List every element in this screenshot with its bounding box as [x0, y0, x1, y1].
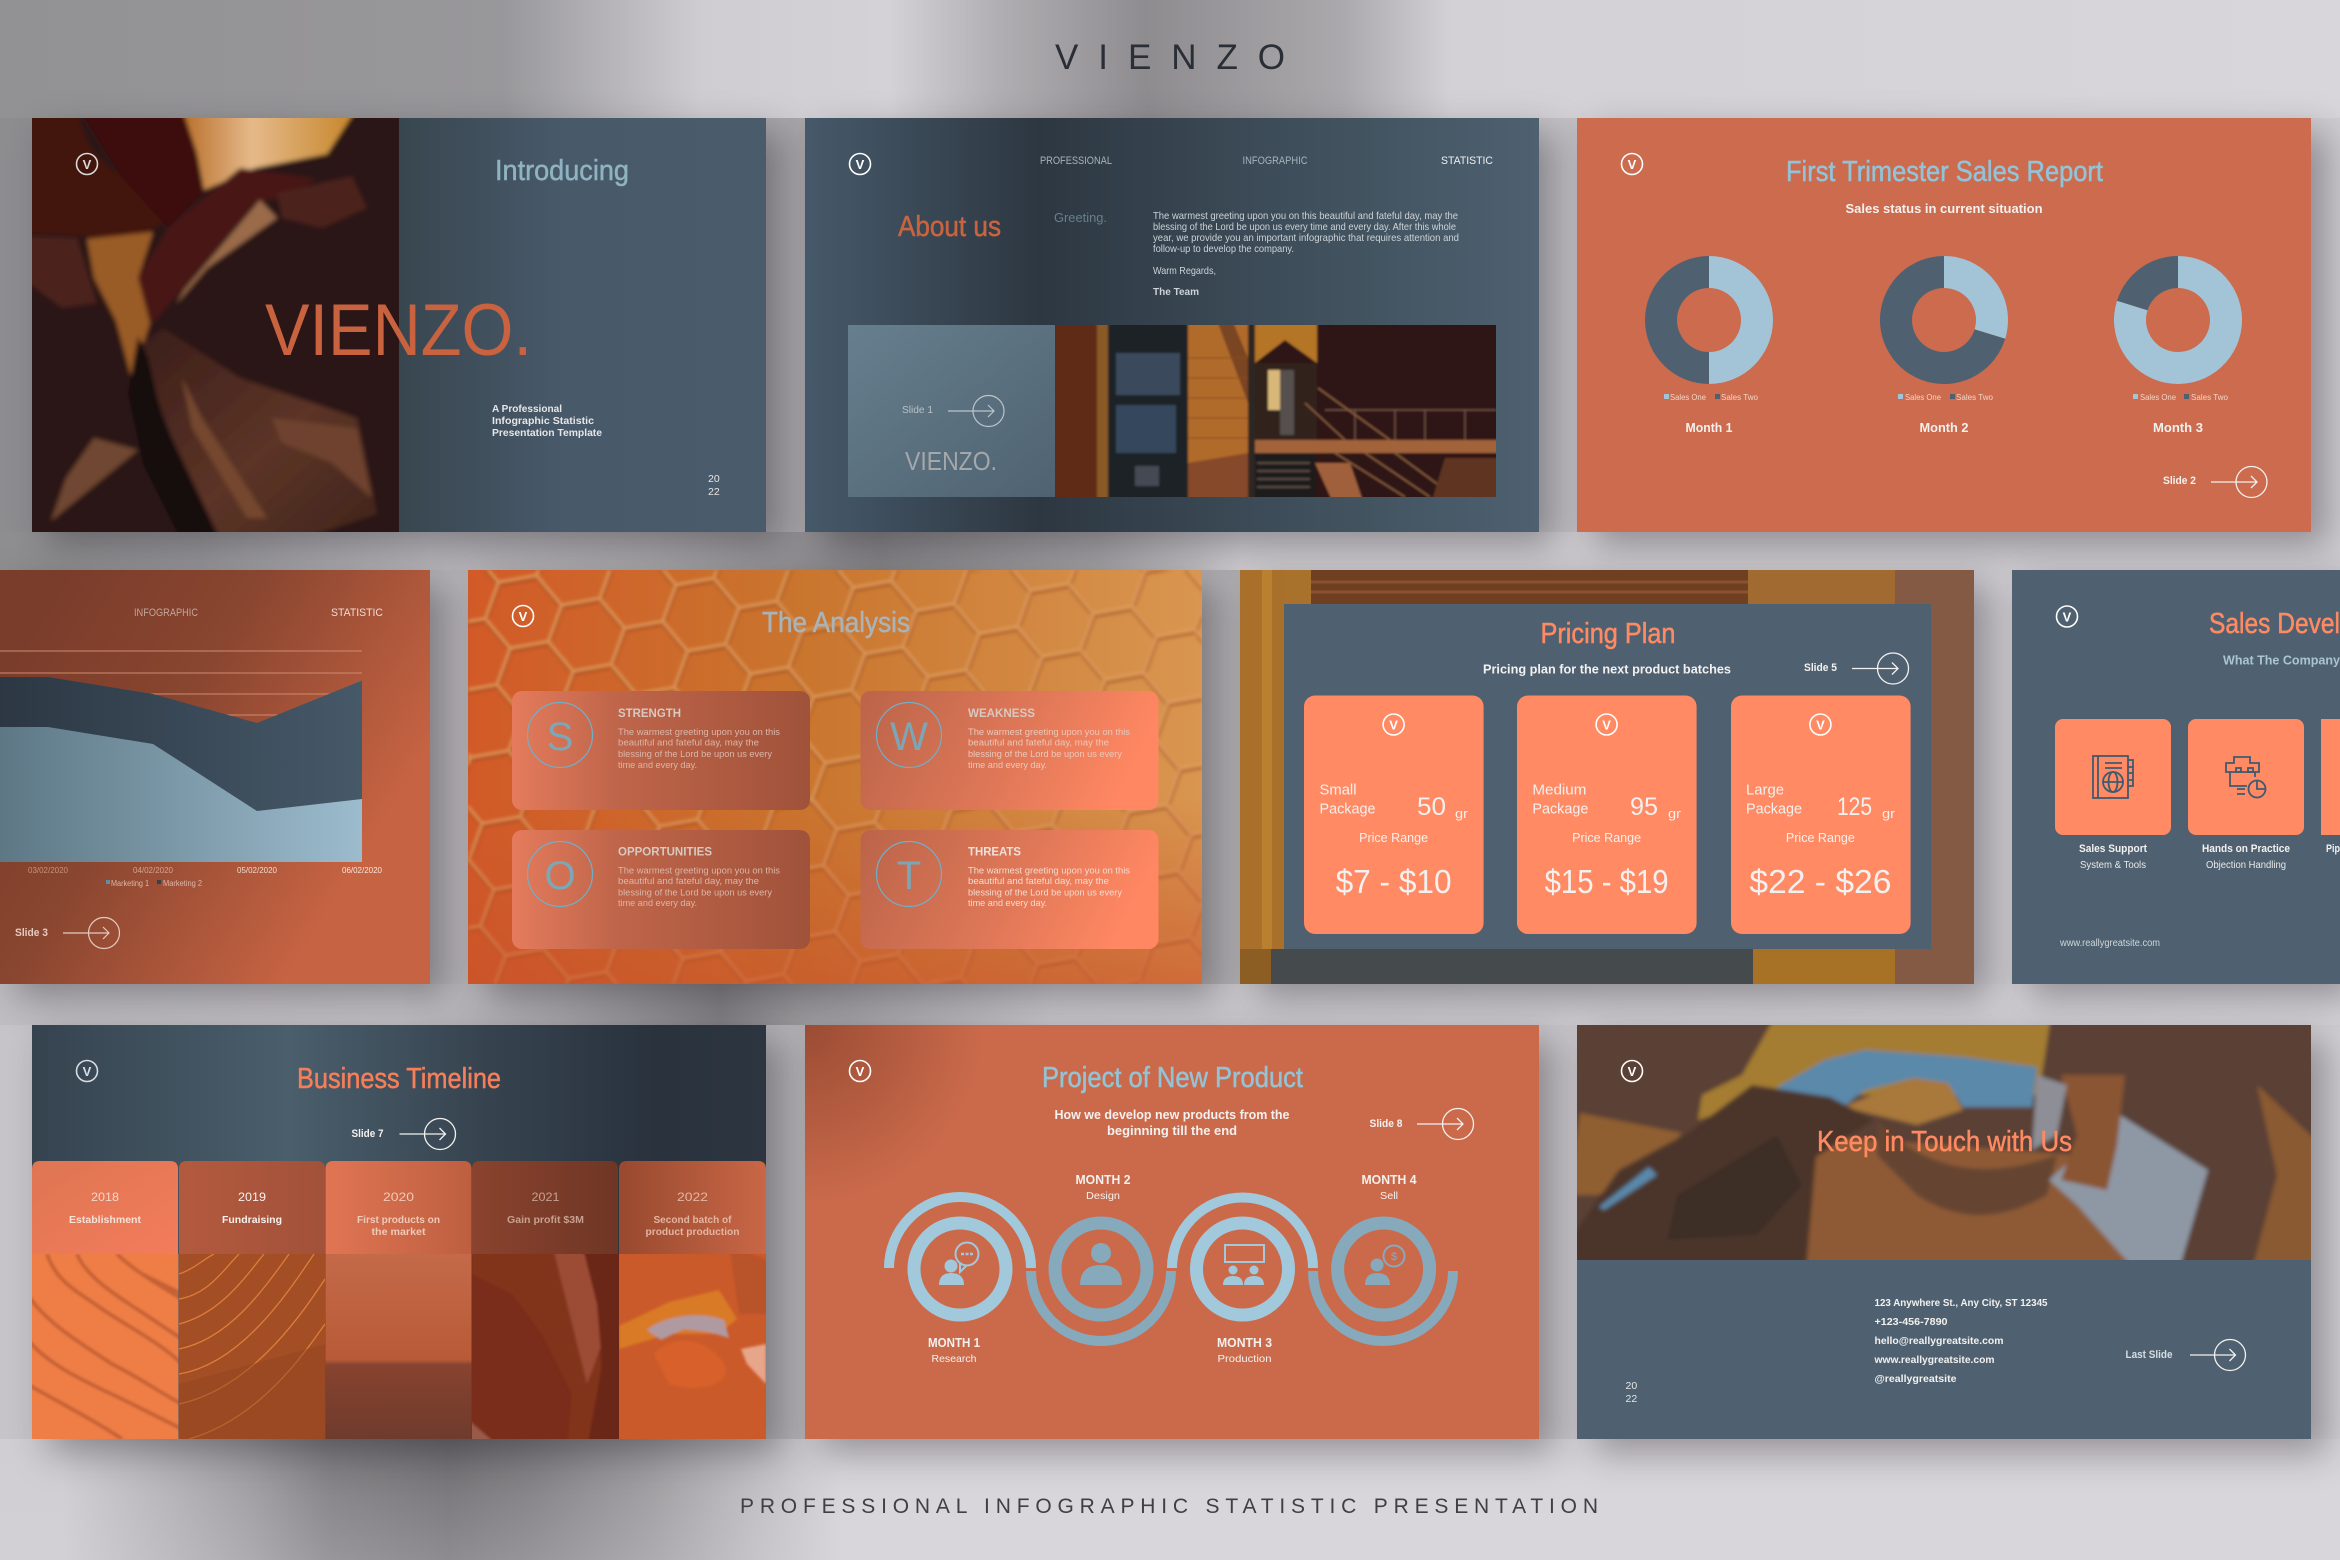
- logo: V: [83, 157, 92, 172]
- label: month 4: MONTH 4: [1362, 1173, 1417, 1187]
- column: 2020: 2020: [383, 1190, 414, 1204]
- card: medium package: 95: [1630, 793, 1658, 821]
- card: large package: [1731, 696, 1911, 934]
- card: medium package: Medium: [1532, 782, 1586, 798]
- tagline: A Professional: [492, 403, 562, 415]
- card: large package: Package: [1746, 800, 1802, 818]
- card: medium package: gr: [1668, 806, 1682, 821]
- card: weakness: blessing of the Lord be upon us every: [968, 749, 1122, 760]
- icon: notebook with globe: [2093, 756, 2133, 798]
- card: small package: V: [1389, 718, 1398, 732]
- greeting text: year, we provide you an important infographic that requires attention and: [1153, 233, 1459, 244]
- card: small package: 50: [1417, 793, 1446, 821]
- card: sales support: Sales Support: [2079, 843, 2147, 855]
- label: month 3: MONTH 3: [1217, 1336, 1272, 1350]
- label: month 4: [1362, 1173, 1417, 1202]
- subheading: Sales status in current situation: [1846, 201, 2043, 216]
- column: 2021: [462, 1161, 629, 1449]
- label: Month 2: Month 2: [1920, 420, 1968, 435]
- navigation: STATISTIC: [331, 607, 383, 619]
- slide link: Slide 1: [902, 404, 933, 416]
- area chart: [0, 651, 383, 888]
- legend: [106, 879, 203, 888]
- column: 2022: product production: [646, 1226, 740, 1238]
- card: hands on practice: [2188, 719, 2304, 871]
- card: medium package: V: [1602, 718, 1611, 732]
- logo: V: [1628, 157, 1637, 172]
- legend: Sales One: [1905, 393, 1942, 402]
- building photo: [1055, 325, 1496, 497]
- card: small package: $7 - $10: [1336, 863, 1452, 900]
- heading: About us: About us: [898, 211, 1001, 243]
- legend: Sales Two: [2191, 393, 2229, 402]
- navigation: INFOGRAPHIC: [134, 607, 198, 619]
- card: medium package: Price Range: [1572, 831, 1641, 845]
- card: strength: time and every day.: [618, 760, 697, 771]
- slide link: Slide 8: [1370, 1118, 1402, 1130]
- card: weakness: time and every day.: [968, 760, 1047, 771]
- panel: slide 1 introducing: [32, 118, 766, 532]
- label: month 3: Production: [1218, 1353, 1272, 1365]
- card: medium package: [1517, 696, 1697, 934]
- year: 22: [708, 486, 720, 498]
- legend: Marketing 1: [111, 879, 150, 888]
- honeycomb photo: [468, 570, 1202, 984]
- card: threats: THREATS: [968, 846, 1021, 858]
- right navy panel: [399, 118, 766, 532]
- logo: [76, 154, 98, 174]
- slide link: Slide 5: [1804, 662, 1837, 674]
- label: Month 1: Month 1: [1686, 420, 1732, 435]
- card: threats: [860, 830, 1158, 949]
- heading: Introducing: Introducing: [495, 155, 629, 187]
- donut chart: month 3: [2114, 256, 2242, 402]
- tagline: [492, 403, 602, 439]
- card: hands on practice: Objection Handling: [2206, 860, 2286, 871]
- card: weakness: beautiful and fateful day, may the: [968, 738, 1109, 748]
- label: month 2: [1076, 1173, 1131, 1202]
- x axis dates: 05/02/2020: [237, 866, 278, 875]
- year: [1626, 1380, 1637, 1405]
- column: 2019: Fundraising: [222, 1214, 282, 1226]
- card: small package: gr: [1455, 806, 1469, 821]
- label: month 4: Sell: [1380, 1190, 1398, 1202]
- card: hands on practice: Hands on Practice: [2202, 843, 2290, 855]
- card: opportunities: time and every day.: [618, 898, 697, 909]
- year: 20: [1626, 1380, 1637, 1392]
- legend: [1898, 393, 1994, 402]
- photo: canyon arch: [619, 1254, 766, 1439]
- navigation: PROFESSIONAL: [1040, 155, 1112, 167]
- slide link: Slide 3: [15, 927, 48, 939]
- slide link: [1804, 653, 1908, 684]
- card: opportunities: The warmest greeting upon you on this: [618, 866, 780, 876]
- logo: [1622, 154, 1642, 174]
- heading: First Trimester Sales Report: [1786, 156, 2103, 188]
- card: opportunities: OPPORTUNITIES: [618, 846, 712, 858]
- photo: sunset horizon: [326, 1254, 472, 1439]
- column: 2019: 2019: [238, 1190, 266, 1204]
- panel: slide about us: [805, 118, 1539, 532]
- x axis dates: 04/02/2020: [133, 866, 174, 875]
- card: opportunities: beautiful and fateful day, may the: [618, 876, 759, 887]
- subheading: [1054, 1108, 1290, 1138]
- card: strength: The warmest greeting upon you on this: [618, 727, 780, 738]
- top heading: VIENZO: VIENZO: [1055, 38, 1285, 77]
- slide link: [1370, 1108, 1474, 1140]
- greeting text: Warm Regards,: [1153, 266, 1216, 277]
- label: month 2: MONTH 2: [1076, 1173, 1131, 1187]
- logo: V: [83, 1064, 92, 1079]
- tagline: Presentation Template: [492, 427, 602, 439]
- label: month 1: Research: [932, 1353, 977, 1365]
- subheading: beginning till the end: [1107, 1124, 1237, 1138]
- heading: Project of New Product: [1042, 1062, 1303, 1094]
- legend: Marketing 2: [163, 879, 203, 888]
- column: 2020: the market: [372, 1226, 426, 1238]
- step 4: sell ring and icon: [1338, 1223, 1430, 1315]
- greeting text: follow-up to develop the company.: [1153, 244, 1294, 255]
- heading: Business Timeline: [297, 1063, 501, 1095]
- x axis dates: 06/02/2020: [342, 866, 383, 875]
- logo: [850, 1060, 870, 1082]
- card: large package: $22 - $26: [1749, 863, 1891, 900]
- heading: The Analysis: [762, 607, 910, 639]
- legend: Sales Two: [1956, 393, 1994, 402]
- canyon photo: [20, 106, 412, 544]
- card: large package: gr: [1882, 806, 1896, 821]
- column: 2021: Gain profit $3M: [507, 1214, 584, 1226]
- card: threats: T: [897, 854, 921, 898]
- step 2: design ring and icon: [1055, 1223, 1147, 1315]
- column: 2021: 2021: [532, 1190, 560, 1204]
- slide link: Slide 2: [2163, 475, 2196, 487]
- x axis dates: [28, 866, 383, 875]
- card: weakness: WEAKNESS: [968, 708, 1035, 720]
- navigation: STATISTIC: [1441, 155, 1493, 167]
- logo: [76, 1060, 98, 1082]
- logo: V: [2063, 610, 2072, 624]
- navigation: INFOGRAPHIC: [1242, 155, 1308, 167]
- card: opportunities: blessing of the Lord be upon us every: [618, 888, 772, 898]
- label: month 2: Design: [1086, 1190, 1120, 1202]
- greeting text: [1153, 211, 1459, 298]
- card: opportunities: O: [544, 854, 576, 898]
- panel: business timeline: [32, 1025, 766, 1439]
- step 3: production ring and icon: [1196, 1223, 1288, 1315]
- contact details: [1874, 1297, 2048, 1385]
- card: sales support: System & Tools: [2080, 860, 2146, 871]
- label: month 3: [1217, 1336, 1272, 1365]
- bottom caption: PROFESSIONAL INFOGRAPHIC STATISTIC PRESENTATION: [740, 1495, 1598, 1518]
- logo: V: [519, 609, 528, 624]
- card: threats: time and every day.: [968, 898, 1047, 909]
- navigation: [1040, 155, 1493, 167]
- panel: area chart slide: [0, 570, 430, 984]
- card: small package: Small: [1320, 782, 1356, 798]
- card: large package: V: [1816, 718, 1825, 732]
- column: 2020: [326, 1161, 472, 1439]
- label: Month 3: Month 3: [2153, 420, 2203, 435]
- label: month 1: MONTH 1: [928, 1336, 980, 1350]
- panel: pricing plan: [1240, 570, 1974, 984]
- step 1: research ring and icon: [914, 1223, 1006, 1315]
- photo: canyon wall: [472, 1254, 619, 1439]
- legend: Sales One: [1670, 393, 1707, 402]
- column: 2018: Establishment: [69, 1214, 141, 1226]
- logo: [850, 154, 870, 174]
- label: month 1: [928, 1336, 980, 1365]
- year: [708, 473, 720, 498]
- panel: keep in touch: [1577, 1025, 2311, 1439]
- card: large package: Large: [1746, 782, 1784, 798]
- card: large package: Price Range: [1786, 831, 1855, 845]
- wood photo background: [1240, 570, 1974, 984]
- navigation: [134, 607, 383, 619]
- card: small package: [1304, 696, 1484, 934]
- column: 2018: [27, 1161, 182, 1439]
- card: large package: 125: [1837, 793, 1872, 821]
- subheading: What The Company: [2223, 654, 2340, 668]
- card: medium package: $15 - $19: [1545, 863, 1669, 900]
- logo: [1622, 1060, 1642, 1082]
- heading: Pricing Plan: [1540, 618, 1676, 650]
- card: threats: beautiful and fateful day, may the: [968, 876, 1109, 887]
- slide link: Slide 7: [352, 1128, 384, 1140]
- greeting text: The warmest greeting upon you on this beautiful and fateful day, may the: [1153, 211, 1458, 222]
- photo: sand lines: [179, 1254, 325, 1439]
- panel: project of new product: [805, 1025, 1539, 1439]
- slide link: [2126, 1340, 2246, 1370]
- subheading: Pricing plan for the next product batches: [1483, 662, 1731, 676]
- legend: Sales One: [2140, 393, 2177, 402]
- photo: dunes: [32, 1254, 178, 1439]
- card: strength: blessing of the Lord be upon us every: [618, 749, 772, 760]
- card: weakness: The warmest greeting upon you on this: [968, 727, 1130, 738]
- subheading: How we develop new products from the: [1054, 1108, 1290, 1122]
- donut chart: month 2: [1880, 256, 2008, 402]
- column: 2020: First products on: [357, 1214, 440, 1226]
- year: 22: [1626, 1393, 1637, 1405]
- x axis dates: 03/02/2020: [28, 866, 69, 875]
- panel: sales development: [2012, 570, 2340, 984]
- contact area: [1577, 1260, 2311, 1439]
- slide link: Last Slide: [2126, 1349, 2172, 1361]
- website link: www.reallygreatsite.com: [2059, 938, 2160, 949]
- card: weakness: [860, 691, 1158, 810]
- logo: V: [856, 157, 865, 172]
- label: Greeting: Greeting.: [1054, 210, 1107, 225]
- brand title: VIENZO.: VIENZO.: [265, 290, 532, 371]
- panel: first trimester sales report: [1577, 118, 2311, 532]
- card: weakness: W: [890, 715, 928, 759]
- heading: Keep in Touch with Us: [1817, 1126, 2072, 1158]
- card: threats: blessing of the Lord be upon us every: [968, 888, 1122, 898]
- cover card: [848, 325, 1055, 497]
- card: strength: [512, 691, 810, 810]
- slide link: [15, 918, 120, 948]
- cover brand: VIENZO.: [905, 446, 997, 476]
- column: 2022: Second batch of: [654, 1214, 732, 1226]
- card: strength: beautiful and fateful day, may the: [618, 738, 759, 748]
- column: 2018: 2018: [91, 1190, 119, 1204]
- step 4: sell ring and icon: $: [1391, 1251, 1397, 1263]
- column: 2022: [619, 1161, 776, 1439]
- card: small package: Package: [1320, 800, 1376, 818]
- logo: [512, 606, 534, 626]
- canyon photo: [1567, 1015, 2321, 1275]
- card: threats: The warmest greeting upon you on this: [968, 866, 1130, 876]
- card: pipeline: [2321, 719, 2340, 855]
- contact details: +123-456-7890: [1874, 1316, 1948, 1328]
- card: strength: S: [547, 715, 573, 759]
- year: 20: [708, 473, 720, 485]
- logo: V: [856, 1064, 865, 1079]
- legend: [1664, 393, 1759, 402]
- slide link: [2163, 466, 2267, 498]
- slide link: [352, 1118, 456, 1150]
- logo: V: [1628, 1064, 1637, 1079]
- card: sales support: [2055, 719, 2171, 871]
- column: 2022: 2022: [677, 1190, 708, 1204]
- legend: Sales Two: [1721, 393, 1759, 402]
- card: medium package: Package: [1532, 800, 1588, 818]
- contact details: @reallygreatsite: [1874, 1373, 1957, 1385]
- logo: [2056, 606, 2078, 627]
- navy inner panel: [1284, 604, 1931, 949]
- greeting text: The Team: [1153, 287, 1199, 298]
- contact details: 123 Anywhere St., Any City, ST 12345: [1874, 1297, 2048, 1309]
- column: 2019: [179, 1161, 325, 1439]
- tagline: Infographic Statistic: [492, 415, 594, 427]
- icon: briefcase with chart: [2226, 757, 2266, 798]
- contact details: hello@reallygreatsite.com: [1874, 1335, 2004, 1347]
- legend: [2133, 393, 2229, 402]
- contact details: www.reallygreatsite.com: [1874, 1354, 1994, 1366]
- card: strength: STRENGTH: [618, 708, 681, 720]
- panel: the analysis SWOT: [468, 570, 1202, 984]
- process wave diagram: [889, 1197, 1453, 1341]
- donut chart: month 1: [1645, 256, 1773, 402]
- card: small package: Price Range: [1359, 831, 1428, 845]
- card: opportunities: [512, 830, 810, 949]
- slide link: [902, 396, 1004, 426]
- greeting text: blessing of the Lord be upon us every time and every day. After this whole: [1153, 222, 1456, 233]
